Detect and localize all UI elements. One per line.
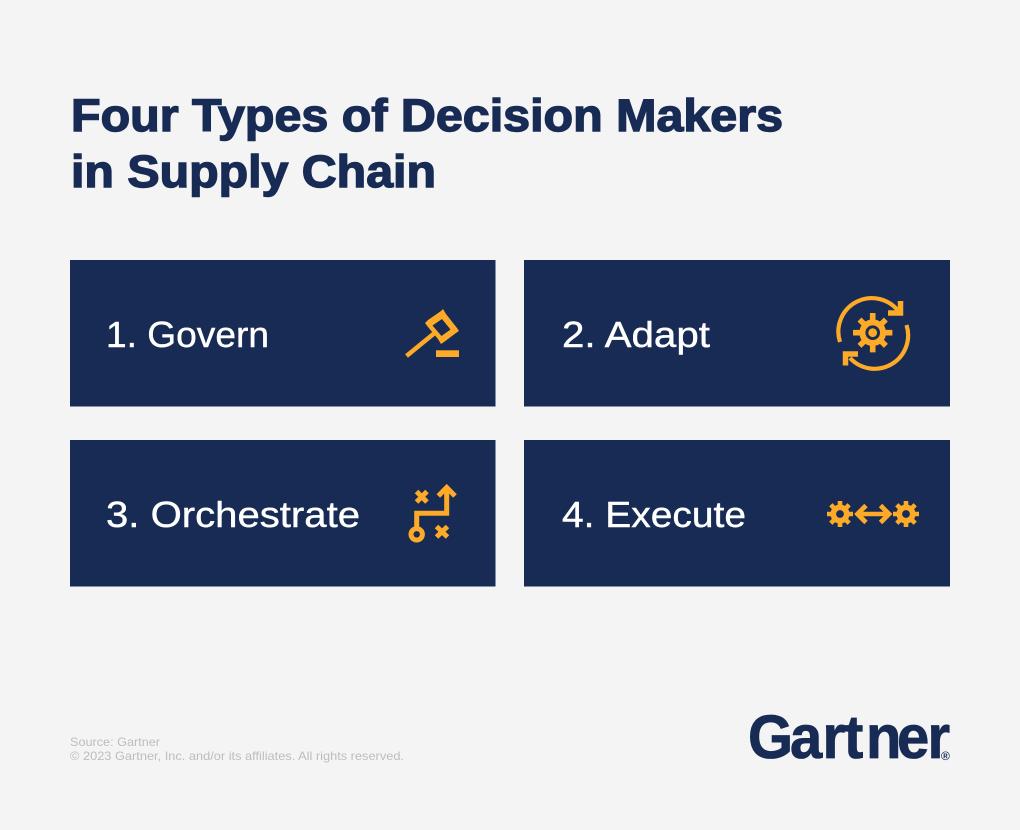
label: 3. Orchestrate: 3. Orchestrate bbox=[106, 494, 360, 535]
source and copyright: Source: Gartner bbox=[70, 735, 160, 749]
panel: 3. Orchestrate bbox=[70, 440, 496, 586]
Gartner logo: ® bbox=[941, 749, 950, 763]
icon: gear with circular arrows bbox=[838, 298, 908, 369]
source and copyright: © 2023 Gartner, Inc. and/or its affiliates. All rights reserved. bbox=[70, 749, 404, 763]
title bbox=[71, 90, 783, 197]
panel: 4. Execute bbox=[524, 440, 950, 586]
title: Four Types of Decision Makers bbox=[71, 90, 783, 141]
panel: 2. Adapt bbox=[524, 260, 950, 406]
label: 4. Execute: 4. Execute bbox=[562, 494, 746, 535]
label: 2. Adapt: 2. Adapt bbox=[562, 314, 710, 355]
title: in Supply Chain bbox=[71, 146, 436, 197]
panel: 1. Govern bbox=[70, 260, 496, 406]
Gartner logo: Gartner bbox=[748, 703, 950, 771]
label: 1. Govern: 1. Govern bbox=[106, 314, 269, 355]
source and copyright bbox=[70, 735, 404, 763]
icon: two gears with arrow bbox=[827, 501, 919, 527]
icon: gavel bbox=[406, 309, 459, 357]
icon: play diagram bbox=[411, 488, 455, 540]
